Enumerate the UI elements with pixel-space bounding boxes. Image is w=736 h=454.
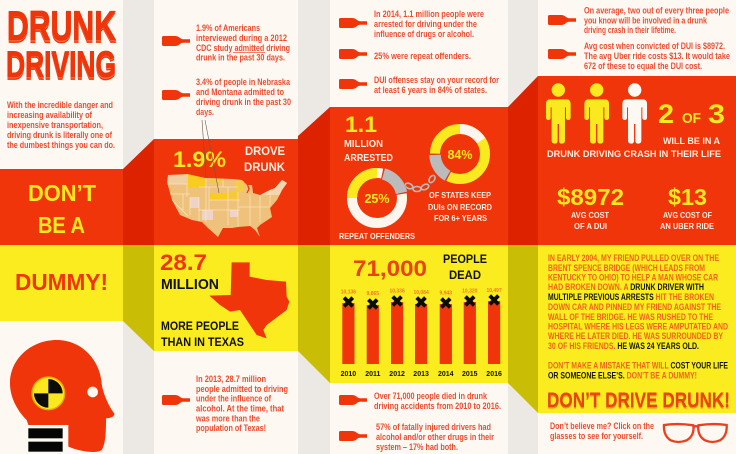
bullet text: 3.4 percent: days. (196, 107, 214, 117)
label: drove drunk: DRUNK (244, 162, 286, 174)
call to action text (550, 421, 654, 441)
bullet text: 2014: In 2014, 1.1 million people were (374, 9, 484, 19)
label: drove drunk (244, 146, 286, 174)
story text (548, 253, 728, 380)
bullet text: 2014: influence of drugs or alcohol. (374, 29, 474, 39)
bottle bullet 5 (339, 49, 367, 59)
bottle bullet 9 (548, 15, 576, 25)
story text: OR SOMEONE ELSE’S. DON’T BE A DUMMY! (548, 370, 697, 380)
bullet text: 1.9 percent: CDC study admitted driving (196, 43, 290, 53)
bottle bullet 2 (162, 90, 190, 100)
icon: crash dummy head (10, 340, 114, 452)
story text: HAD BROKEN DOWN. A DRUNK DRIVER WITH (548, 282, 704, 292)
stat: 71,000 people dead: PEOPLE (443, 252, 487, 266)
stat: uber cost: $13 (668, 184, 707, 210)
label: of states keep: DUIs ON RECORD (428, 202, 492, 212)
bar chart: deaths per year: 10,497 (486, 288, 502, 294)
stat: 2 of 3: 2 (658, 99, 674, 129)
bullet text: 2013 (195, 374, 288, 433)
bullet text: record (374, 75, 499, 95)
bar chart: deaths per year: 10,320 (462, 288, 478, 294)
bar chart: deaths per year: 2016 (486, 371, 502, 378)
bottle bullet 1 (162, 36, 190, 46)
slogan: don't be a dummy: BE A (38, 212, 85, 238)
intro text (7, 100, 115, 150)
bottle bullet 6 (339, 79, 367, 89)
bullet text: 57 percent (376, 422, 494, 452)
bullet text: 2013: alcohol. At the time, that (196, 404, 284, 414)
bar chart: deaths per year (341, 288, 502, 378)
stat: uber cost: AVG COST OF (663, 211, 712, 220)
bullet text: 1.9 percent: 1.9% of Americans (196, 23, 260, 33)
label: repeat offenders: REPEAT OFFENDERS (339, 231, 415, 241)
intro text: the dumbest things you can do. (7, 140, 115, 150)
stat: 2 of 3 (658, 99, 725, 129)
stat: 71,000 people dead: DEAD (449, 268, 481, 282)
label: crash in their life: DRUNK DRIVING CRASH IN THEIR LIFE (547, 149, 721, 160)
icon: glasses (664, 424, 727, 442)
bullet text: 57 percent: alcohol and/or other drugs in their (376, 432, 494, 442)
title: drunk driving: DRUNK (7, 3, 116, 51)
stat: 28.7 million: MILLION (161, 276, 219, 293)
donut: 25 percent (352, 173, 402, 223)
title: drunk driving: DRIVING (6, 44, 116, 85)
bottle bullet 8 (339, 431, 367, 441)
bar chart: deaths per year: 2015 (462, 371, 478, 378)
stat: dui cost: AVG COST (571, 211, 609, 220)
bar chart: deaths per year: 2012 (389, 371, 405, 378)
bullet text: two of three (584, 6, 729, 35)
bullet text: two of three: driving crash in their lifetime. (584, 25, 676, 35)
bullet text: 3.4 percent: 3.4% of people in Nebraska (196, 77, 291, 87)
bullet text: 1.9 percent: interviewed during a 2012 (196, 33, 287, 43)
bullet text: 71,000: Over 71,000 people died in drunk (374, 391, 488, 401)
label: crash in their life (547, 136, 721, 160)
bottle bullet 4 (339, 18, 367, 28)
bullet text: 2014: arrested for driving under the (374, 19, 477, 29)
call to action text: glasses to see for yourself. (550, 431, 643, 441)
bottle bullet 7 (339, 395, 367, 405)
stat: 1.1 million arrested: MILLION (344, 139, 383, 150)
story text: 30 OF HIS FRIENDS. HE WAS 24 YEARS OLD. (548, 341, 699, 351)
bullet text: 1.9 percent: drunk in the past 30 days. (196, 52, 285, 62)
panel: intro column (6, 2, 116, 452)
panel: drove drunk (160, 23, 295, 433)
title: drunk driving: DRIVING (6, 45, 116, 87)
bottle bullet 3 (162, 395, 190, 405)
stat: 1.1 million arrested: ARRESTED (344, 153, 393, 164)
stat: 1.1 million arrested: 1.1 (345, 112, 377, 137)
bar chart: deaths per year: 2011 (365, 371, 380, 378)
bullet text: repeat offenders: 25% were repeat offenders. (374, 51, 471, 61)
donut: 84 percent (435, 129, 485, 179)
slogan: don't be a dummy: DUMMY! (15, 269, 108, 295)
bullet text: 2014 (374, 9, 484, 39)
icon: handcuffs (382, 154, 449, 194)
title: drunk driving: DRUNK (7, 2, 116, 49)
bullet text: record: at least 6 years in 84% of states. (374, 85, 487, 95)
intro text: driving drunk is literally one of (7, 130, 113, 140)
bullet text: 3.4 percent (196, 77, 291, 117)
intro text: increasing availability of (7, 110, 93, 120)
bullet text: 57 percent: system – 17% had both. (376, 442, 458, 452)
stat: dui cost: OF A DUI (574, 222, 607, 231)
bullet text: cost: 672 of these to equal the DUI cost. (584, 61, 702, 71)
stat: 28.7 million (160, 250, 219, 293)
bullet text: 1.9 percent (196, 23, 290, 62)
bullet text: 3.4 percent: and Montana admitted to (196, 87, 284, 97)
bar chart: deaths per year: 10,136 (341, 290, 356, 296)
stat: 28.7 million: 28.7 (160, 250, 207, 275)
label: more people than in texas: MORE PEOPLE (161, 319, 239, 333)
stat: 1.9 percent: 1.9% (173, 147, 226, 172)
stat: 2 of 3: 3 (708, 99, 725, 129)
bullet text: 71,000 (374, 391, 501, 411)
bullet text: 71,000: driving accidents from 2010 to 2016. (374, 401, 501, 411)
stat: uber cost: AN UBER RIDE (660, 222, 715, 231)
stat: uber cost (660, 184, 715, 231)
label: drove drunk: DROVE (245, 146, 285, 158)
stat: 71,000 people dead: 71,000 (353, 256, 427, 281)
slogan: don't be a dummy: DON’T (28, 180, 96, 206)
donut: 84 percent: 84% (447, 148, 473, 162)
bullet text: cost (584, 41, 730, 71)
map: united states (167, 174, 287, 237)
bottle bullet 10 (548, 49, 576, 59)
icon: three people (546, 83, 647, 144)
title: drunk driving: DRUNK (7, 4, 116, 52)
bullet text: 57 percent: 57% of fatally injured drivers had (376, 422, 491, 432)
stat: dui cost: $8972 (557, 184, 624, 210)
panel: arrests (339, 9, 502, 452)
bullet text: 3.4 percent: driving drunk in the past 30 (196, 97, 291, 107)
bar chart: deaths per year: 2010 (341, 371, 356, 378)
label: more people than in texas (161, 319, 244, 349)
story text: MULTIPLE PREVIOUS ARRESTS HIT THE BROKEN (548, 292, 714, 302)
bullet text: two of three: you know will be involved in a drunk (584, 16, 708, 26)
intro text: With the incredible danger and (7, 100, 113, 110)
bullet text: 2013: was more than the (195, 414, 260, 424)
stat: 71,000 people dead (353, 252, 487, 282)
call to action text: Don’t believe me? Click on the (550, 421, 654, 431)
bullet text: 2013: under the influence of (196, 394, 272, 404)
donut: 25 percent: 25% (364, 192, 390, 206)
bar chart: deaths per year: 2014 (438, 371, 454, 378)
bullet text: record: DUI offenses stay on your record for (374, 75, 499, 85)
title: drunk driving (6, 2, 116, 88)
bar chart: deaths per year: 9,865 (367, 291, 379, 297)
bar chart: deaths per year: 10,336 (389, 288, 405, 294)
pointer lines (202, 120, 219, 193)
panel: crash odds and story (546, 6, 730, 442)
label: of states keep (428, 190, 492, 223)
label: of states keep: FOR 6+ YEARS (434, 213, 487, 223)
stat: 1.1 million arrested (344, 112, 393, 164)
bar chart: deaths per year: 2013 (413, 371, 429, 378)
slogan: don't be a dummy (15, 180, 108, 295)
bullet text: 2013: people admitted to driving (196, 384, 288, 394)
label: more people than in texas: THAN IN TEXAS (161, 335, 244, 349)
label: of states keep: OF STATES KEEP (429, 190, 491, 200)
bar chart: deaths per year: 9,943 (440, 290, 452, 296)
icon: texas (209, 262, 289, 338)
bullet text: 2013: In 2013, 28.7 million (196, 374, 266, 384)
stat: 2 of 3: OF (682, 110, 701, 127)
bullet text: 2013: population of Texas! (196, 423, 266, 433)
intro text: inexpensive transportation, (7, 120, 103, 130)
label: crash in their life: WILL BE IN A (663, 136, 720, 147)
title: drunk driving: DRIVING (6, 46, 116, 88)
bar chart: deaths per year: 10,084 (413, 290, 429, 296)
stat: dui cost (557, 184, 624, 231)
